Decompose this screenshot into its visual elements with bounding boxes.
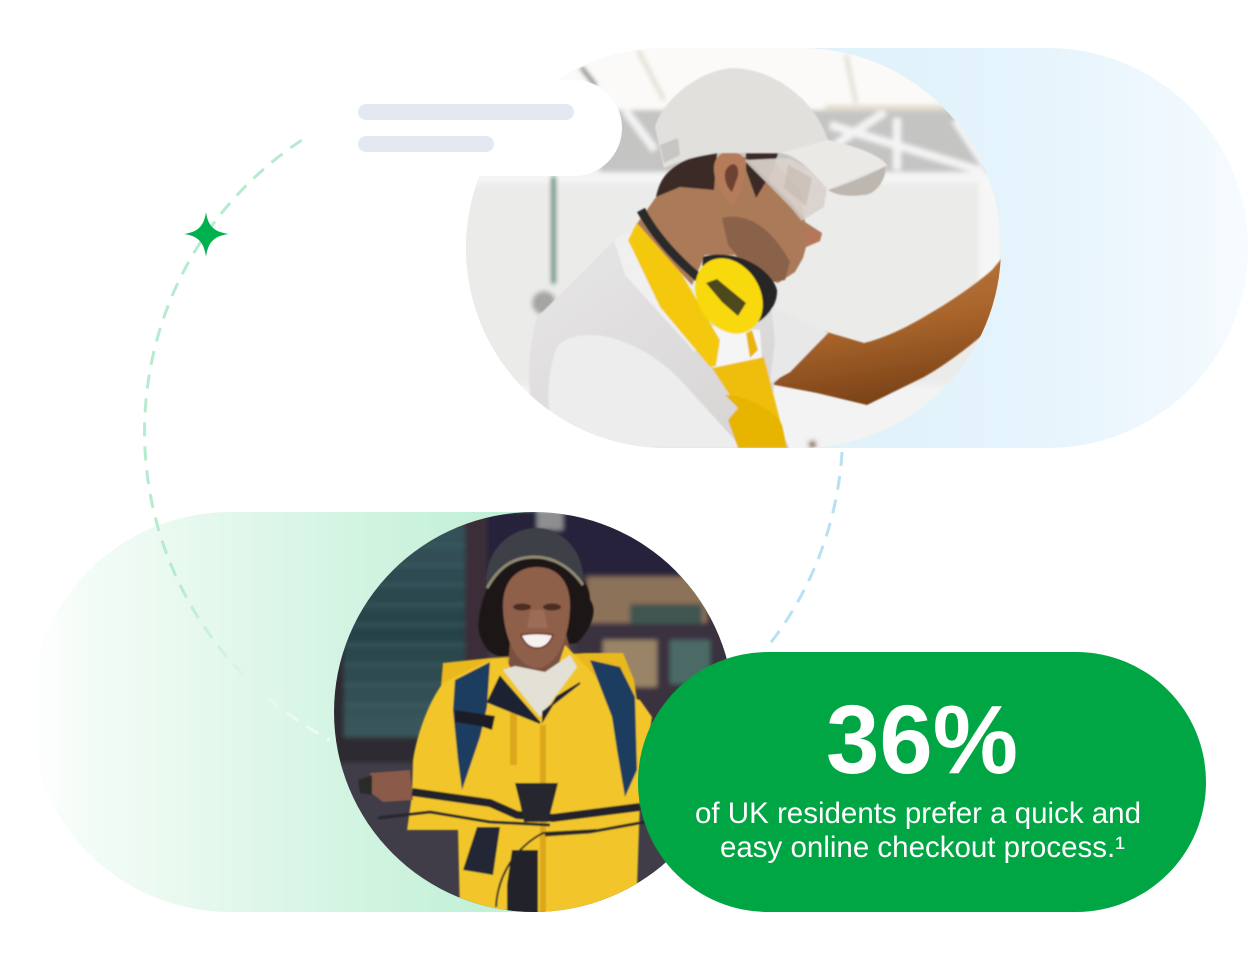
apron strap: [628, 223, 720, 367]
white tag with placeholder lines: [300, 80, 622, 176]
arm: [770, 258, 1002, 405]
bike display: [515, 783, 558, 822]
delivery bag: [438, 653, 640, 720]
photo background: warehouse: [460, 40, 1010, 460]
ear: [714, 151, 746, 205]
icon: green sparkle: [184, 212, 229, 257]
left strap buckle: [455, 710, 495, 730]
placeholder bar short: [358, 136, 494, 152]
baseball cap: [655, 68, 887, 196]
goggles: [746, 158, 828, 220]
helmet: [486, 528, 583, 588]
handlebar grip: [358, 775, 372, 795]
right eye: [543, 604, 561, 610]
handlebar: [412, 792, 640, 818]
neck: [508, 634, 571, 673]
green background pill: [30, 512, 734, 912]
inner collar: [488, 677, 580, 723]
right backpack strap: [590, 660, 637, 797]
apron pocket: [712, 357, 787, 448]
bike stem: [507, 850, 538, 915]
blue background pill: [466, 48, 1248, 448]
statistic: 36%: [826, 685, 1018, 794]
hair: [656, 153, 717, 197]
shirt: [520, 230, 828, 450]
stat pill: [638, 652, 1206, 912]
jacket: [407, 645, 652, 915]
statistic caption: of UK residents prefer a quick and: [695, 797, 1141, 830]
ear defender cup: [700, 255, 777, 325]
t-shirt: [503, 655, 577, 717]
hand: [370, 770, 413, 802]
left backpack strap: [453, 662, 490, 790]
neck and face: [636, 153, 822, 285]
dashed arc: left green: [145, 140, 330, 740]
brake levers: [378, 812, 645, 835]
apron buckle: [746, 330, 758, 358]
face: [503, 567, 570, 668]
placeholder bar long: [358, 104, 574, 120]
ear defender headband: [636, 207, 700, 282]
grip: [463, 827, 500, 875]
hair: [478, 552, 594, 656]
dashed arc: right blue: [765, 452, 842, 650]
statistic caption: easy online checkout process.¹: [720, 831, 1125, 864]
photo: smiling courier on bike: [330, 510, 740, 915]
left eye: [513, 604, 531, 610]
smile: [521, 634, 553, 648]
cable: [496, 830, 597, 907]
photo: worker with cap and ear defenders: [460, 40, 1010, 460]
photo background: street: [330, 510, 740, 915]
